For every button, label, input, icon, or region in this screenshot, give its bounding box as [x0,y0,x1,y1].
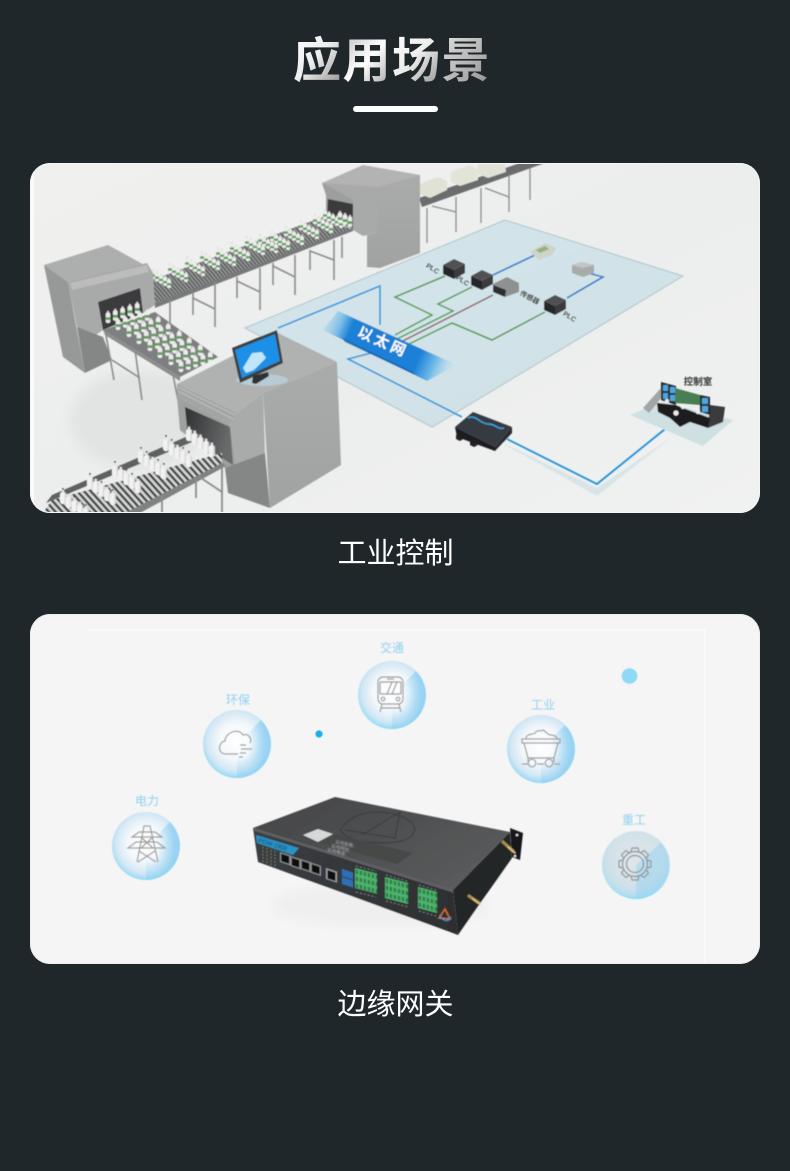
dot small [315,730,323,738]
panel: industrial control [30,163,760,520]
logo mark [439,909,451,921]
ethernet band [323,311,457,381]
USB ports [342,869,353,888]
PLC devices: PLC [561,311,577,324]
PLC devices [424,243,594,324]
ethernet ports [280,852,337,883]
bubble: heavy industry [602,813,670,899]
dot large [622,668,637,684]
bubble: heavy industry: 重工 [622,813,646,827]
machine: top [322,165,420,268]
bottom conveyor [43,425,226,520]
bubble: industry: 工业 [531,698,555,712]
title: 景 [442,35,490,88]
edge gateway device [253,797,523,935]
control room [630,376,733,446]
QR code [303,829,333,842]
PLC devices: PLC [454,275,470,288]
machine: centre with monitor [177,333,341,508]
serial gateway device [455,412,512,451]
info plate: 公司名称: [335,838,355,850]
ethernet band: 以太网 [355,324,411,361]
PLC devices: PLC [424,263,440,276]
PLC devices: 传感器 [518,289,541,306]
title underline [353,106,438,112]
bubble: environment: 环保 [226,693,250,707]
bubble: transit: 交通 [380,640,404,655]
bubble: transit [358,640,426,729]
title [293,35,490,88]
bubble: environment [203,693,271,778]
front conveyor with bottles [103,302,218,400]
terminal blocks [355,866,437,916]
control room: 控制室 [684,376,712,388]
title: 用 [342,35,391,88]
blue model label: PGW-1900 [257,838,288,853]
title: 应 [293,35,341,88]
info plate [320,840,412,864]
title: 场 [392,35,440,88]
floor plate [245,220,683,496]
info plate: 公司电话: [327,846,347,858]
antennas [469,842,515,904]
caption: industrial control: 工业控制 [337,537,454,570]
bubble: power: 电力 [135,794,159,808]
long conveyor [151,209,353,327]
blue model label [256,835,299,855]
upper right conveyor with boxes [419,163,545,243]
network cabling [278,255,670,484]
monitor [232,330,283,384]
caption: edge gateway: 边缘网关 [337,988,454,1021]
info plate: 公司网址: [331,842,351,854]
panel: edge gateway [30,614,760,964]
bubble: power [112,794,180,880]
bubble: industry [507,698,575,783]
machine: left [44,245,155,373]
